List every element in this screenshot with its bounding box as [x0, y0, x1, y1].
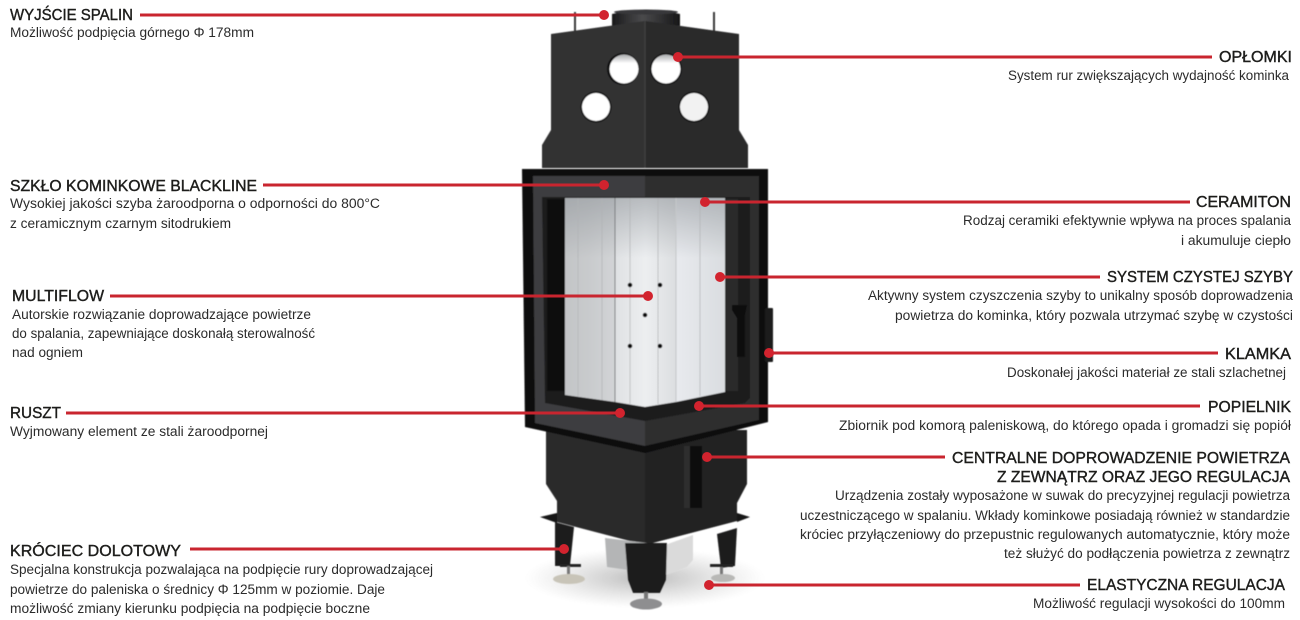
- callout: elastyczna regulacja: [704, 577, 1285, 611]
- callout: centralne doprowadzenie powietrza: [702, 450, 1290, 561]
- callout: ceramiton: CERAMITON: [1196, 194, 1291, 211]
- callout: szkło kominkowe blackline: SZKŁO KOMINKOWE BLACKLINE: [10, 178, 257, 195]
- adjustable feet: [553, 564, 735, 610]
- air regulation slider: [684, 446, 702, 508]
- callout: wyjście spalin: Możliwość podpięcia górnego Φ 178mm: [10, 25, 254, 40]
- callout: opłomki: [673, 49, 1292, 83]
- door handle: [732, 305, 773, 362]
- callout: centralne doprowadzenie powietrza: uczestniczącego w spalaniu. Wkłady kominkowe posiadają również w standardzie: [800, 508, 1290, 523]
- callout: króciec dolotowy: [10, 541, 569, 616]
- callout: centralne doprowadzenie powietrza: Z ZEWNĄTRZ ORAZ JEGO REGULACJA: [997, 469, 1290, 486]
- callout: opłomki: System rur zwiększających wydajność kominka: [1008, 68, 1289, 83]
- callout: szkło kominkowe blackline: [10, 178, 609, 231]
- mounting rods: [575, 12, 714, 32]
- callout: króciec dolotowy: powietrze do paleniska o średnicy Φ 125mm w poziomie. Daje: [10, 582, 385, 597]
- fireplace insert illustration: [522, 10, 773, 610]
- callout: multiflow: do spalania, zapewniające doskonałą sterowalność: [12, 326, 315, 341]
- callout: system czystej szyby: powietrza do kominka, który pozwala utrzymać szybę w czystości: [895, 308, 1293, 323]
- callout: multiflow: [12, 288, 653, 360]
- callout: wyjście spalin: [10, 5, 609, 40]
- callout: elastyczna regulacja: ELASTYCZNA REGULACJA: [1087, 577, 1285, 594]
- callout: króciec dolotowy: możliwość zmiany kierunku podpięcia na podpięcie boczne: [10, 601, 370, 616]
- upper smoke chamber: [542, 21, 748, 168]
- heat exchanger tubes: [580, 53, 710, 122]
- callout: system czystej szyby: [715, 269, 1293, 323]
- callout: szkło kominkowe blackline: Wysokiej jakości szyba żaroodporna o odporności do 800°C: [10, 196, 380, 211]
- air duct: [605, 535, 693, 575]
- callout: szkło kominkowe blackline: z ceramicznym czarnym sitodrukiem: [10, 216, 231, 231]
- mounting plate: [540, 513, 750, 523]
- multiflow air holes: [628, 283, 662, 348]
- door inner frame: [533, 176, 759, 446]
- callout: centralne doprowadzenie powietrza: Urządzenia zostały wyposażone w suwak do precyzyjnej regulacji powietrza: [835, 488, 1290, 503]
- callout: ruszt: Wyjmowany element ze stali żaroodpornej: [10, 424, 268, 439]
- glass opening: [542, 197, 750, 421]
- callout: ruszt: RUSZT: [10, 405, 61, 422]
- door outer frame: [522, 169, 768, 453]
- callout: popielnik: [694, 399, 1291, 433]
- callout: popielnik: POPIELNIK: [1208, 399, 1291, 416]
- callout: króciec dolotowy: KRÓCIEC DOLOTOWY: [10, 541, 181, 560]
- callout: multiflow: nad ogniem: [12, 345, 83, 360]
- ceramic lining: [565, 198, 725, 407]
- callout: ceramiton: [700, 194, 1291, 248]
- callout: popielnik: Zbiornik pod komorą paleniskową, do którego opada i gromadzi się popiół: [839, 418, 1291, 433]
- callout: klamka: Doskonałej jakości materiał ze stali szlachetnej: [1007, 365, 1286, 380]
- callout: klamka: KLAMKA: [1225, 346, 1291, 363]
- left and right firebox shadow columns: [547, 199, 738, 391]
- flue outlet: [612, 10, 680, 28]
- callout: system czystej szyby: Aktywny system czyszczenia szyby to unikalny sposób doprowadzenia: [868, 288, 1293, 303]
- callout: wyjście spalin: WYJŚCIE SPALIN: [10, 5, 133, 24]
- callout: elastyczna regulacja: Możliwość regulacji wysokości do 100mm: [1033, 596, 1285, 611]
- callout: system czystej szyby: SYSTEM CZYSTEJ SZYBY: [1107, 269, 1293, 286]
- callout: klamka: [764, 346, 1291, 380]
- callout: multiflow: Autorskie rozwiązanie doprowadzające powietrze: [12, 307, 311, 322]
- callout: króciec dolotowy: Specjalna konstrukcja pozwalająca na podpięcie rury doprowadzającej: [10, 562, 433, 577]
- callout: multiflow: MULTIFLOW: [12, 288, 105, 305]
- callout: centralne doprowadzenie powietrza: też służyć do podłączenia powietrza z zewnątrz: [1004, 546, 1290, 561]
- base body: [546, 430, 747, 545]
- callout: opłomki: OPŁOMKI: [1219, 49, 1292, 66]
- callout: centralne doprowadzenie powietrza: CENTRALNE DOPROWADZENIE POWIETRZA: [952, 450, 1290, 467]
- legs: [555, 522, 737, 593]
- callout: ceramiton: i akumuluje ciepło: [1181, 233, 1291, 248]
- floor shadow: [525, 548, 765, 608]
- callout: centralne doprowadzenie powietrza: króciec przyłączeniowy do przepustnic regulowanych automatycznie, który może: [800, 527, 1290, 542]
- callout: ceramiton: Rodzaj ceramiki efektywnie wpływa na proces spalania: [963, 213, 1291, 228]
- callout: ruszt: [10, 405, 625, 439]
